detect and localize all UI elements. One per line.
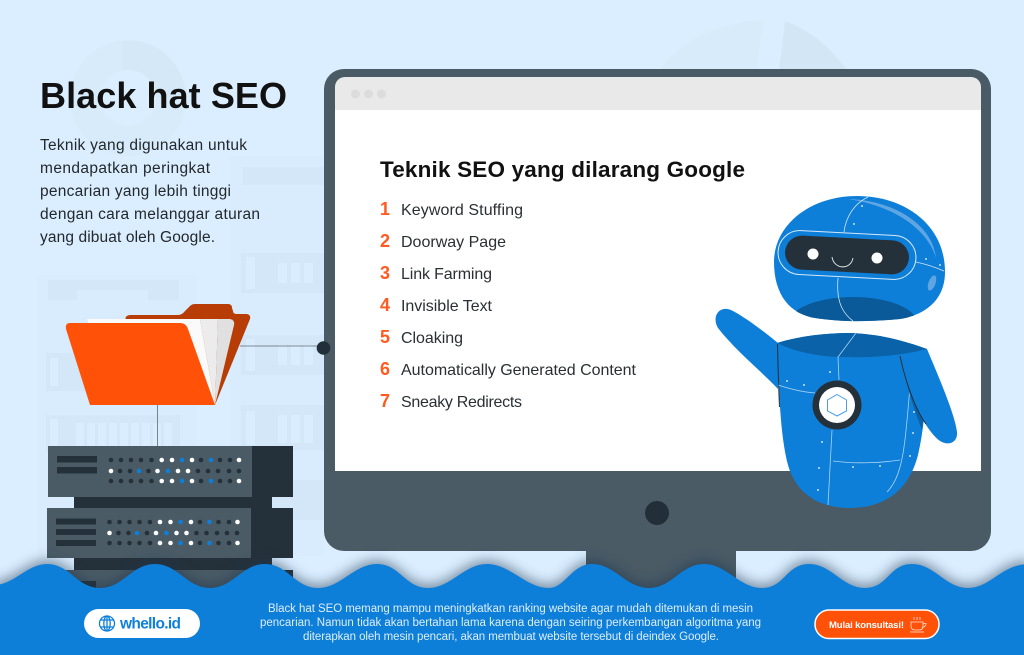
list heading: Teknik SEO yang dilarang Google bbox=[380, 157, 745, 182]
item 6: Automatically Generated Content bbox=[401, 362, 637, 379]
server unit 3 bbox=[47, 570, 293, 592]
folder icon bbox=[66, 304, 250, 405]
title: Black hat SEO bbox=[40, 75, 287, 116]
item 1: 1 bbox=[380, 199, 390, 219]
intro paragraph: pencarian yang lebih tinggi bbox=[40, 183, 231, 200]
robot left arm bbox=[716, 309, 778, 389]
monitor frame bbox=[324, 69, 991, 551]
robot right arm bbox=[900, 349, 957, 443]
robot visor bbox=[777, 229, 917, 281]
footer text bbox=[260, 603, 761, 643]
intro paragraph: Teknik yang digunakan untuk bbox=[40, 137, 247, 154]
list of techniques bbox=[380, 199, 637, 411]
robot body bbox=[777, 333, 927, 508]
screen bbox=[335, 110, 981, 471]
footer text: pencarian. Namun tidak akan bertahan lama karena dengan seiring perkembangan algoritma yang bbox=[260, 617, 761, 629]
robot bbox=[716, 196, 957, 508]
logo text: whello.id bbox=[119, 616, 181, 632]
wave shadow bbox=[0, 560, 1024, 651]
logo pill bbox=[84, 609, 200, 638]
background decoration: faint charts and servers bbox=[37, 20, 846, 575]
intro paragraph: yang dibuat oleh Google. bbox=[40, 229, 215, 246]
item 4 bbox=[380, 295, 493, 315]
intro paragraph bbox=[40, 137, 260, 246]
intro paragraph: mendapatkan peringkat bbox=[40, 160, 211, 177]
footer text: diterapkan oleh mesin pencari, akan membuat website tersebut di deindex Google. bbox=[303, 631, 719, 643]
item 6: 6 bbox=[380, 359, 390, 379]
coffee cup icon bbox=[910, 617, 926, 632]
server stack bbox=[47, 446, 293, 592]
globe icon bbox=[100, 616, 114, 631]
connector lines bbox=[158, 346, 323, 525]
browser dots bbox=[351, 90, 386, 98]
footer text: Black hat SEO memang mampu meningkatkan ranking website agar mudah ditemukan di mesin bbox=[268, 603, 753, 615]
item 3 bbox=[380, 263, 492, 283]
server connectors bbox=[74, 497, 272, 570]
item 5: Cloaking bbox=[401, 330, 463, 347]
item 5: 5 bbox=[380, 327, 390, 347]
browser bar bbox=[335, 77, 981, 110]
server unit 1 bbox=[48, 446, 293, 497]
footer wave band bbox=[0, 564, 1024, 655]
consultation button: Mulai konsultasi! bbox=[829, 620, 904, 631]
item 3: 3 bbox=[380, 263, 390, 283]
robot chest emblem bbox=[812, 380, 862, 430]
intro paragraph: dengan cara melanggar aturan bbox=[40, 206, 260, 223]
server unit 2 bbox=[47, 508, 293, 558]
monitor stand bbox=[586, 545, 736, 590]
item 7: Sneaky Redirects bbox=[401, 394, 522, 411]
consultation button bbox=[815, 610, 939, 638]
item 2: 2 bbox=[380, 231, 390, 251]
item 4: Invisible Text bbox=[401, 298, 493, 315]
camera bbox=[645, 501, 669, 525]
item 3: Link Farming bbox=[401, 266, 492, 283]
item 2: Doorway Page bbox=[401, 234, 506, 251]
robot head bbox=[774, 196, 945, 322]
item 7: 7 bbox=[380, 391, 390, 411]
item 1: Keyword Stuffing bbox=[401, 202, 523, 219]
connector node bbox=[317, 341, 330, 355]
item 5 bbox=[380, 327, 463, 347]
item 4: 4 bbox=[380, 295, 390, 315]
monitor bbox=[324, 69, 991, 551]
